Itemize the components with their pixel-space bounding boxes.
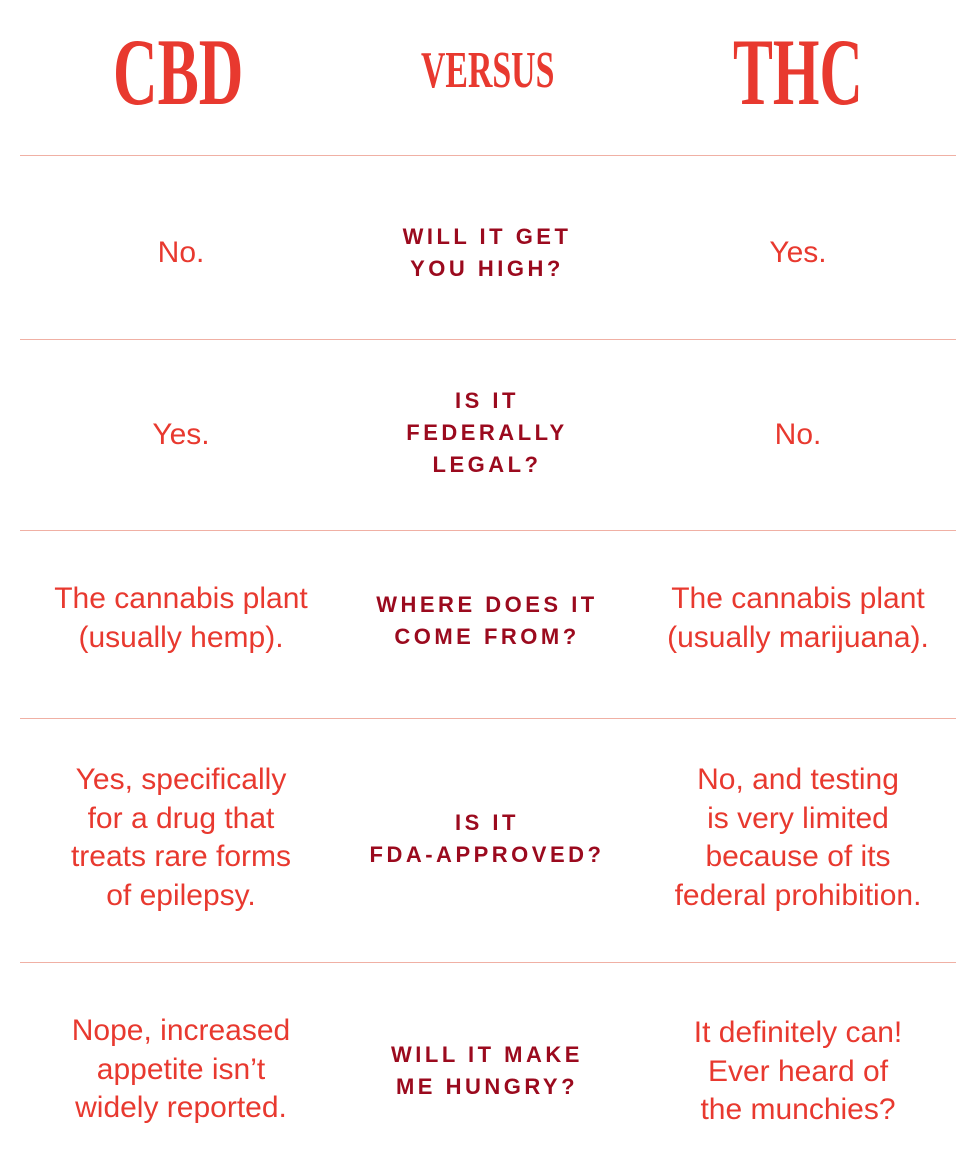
row 2: question: IS IT xyxy=(455,388,519,413)
row 4: THC answer: No, and testing xyxy=(697,763,899,796)
row 5: THC answer: the munchies? xyxy=(700,1093,896,1126)
row 5: THC answer xyxy=(694,1016,902,1126)
row 3: CBD answer xyxy=(54,582,308,654)
row 4: THC answer: federal prohibition. xyxy=(675,878,921,912)
row 4: CBD answer xyxy=(71,763,291,912)
row 3: CBD answer: (usually hemp). xyxy=(78,620,284,654)
row 5: CBD answer: Nope, increased xyxy=(72,1014,290,1047)
row 2: CBD answer: Yes. xyxy=(152,418,210,451)
row 4: CBD answer: treats rare forms xyxy=(71,840,291,873)
row 1: THC answer: Yes. xyxy=(769,236,827,269)
row 5: THC answer: Ever heard of xyxy=(708,1054,888,1088)
row 2: question: FEDERALLY xyxy=(406,420,568,445)
row 4: THC answer: because of its xyxy=(705,840,891,873)
row 3: THC answer: (usually marijuana). xyxy=(667,620,929,654)
row 5: CBD answer xyxy=(72,1014,290,1124)
row 3: question: COME FROM? xyxy=(394,624,580,649)
row 3: THC answer xyxy=(667,582,929,654)
row 2: THC answer: No. xyxy=(775,418,821,451)
row 4: THC answer: is very limited xyxy=(707,802,889,834)
row 2: question xyxy=(406,388,568,477)
row 1: question xyxy=(402,224,571,281)
row 1: question: YOU HIGH? xyxy=(410,256,564,281)
row 3: question xyxy=(376,592,598,649)
row 4: CBD answer: of epilepsy. xyxy=(106,878,256,912)
row 4: question xyxy=(370,810,604,867)
row 1: question: WILL IT GET xyxy=(403,224,571,249)
row 5: question: ME HUNGRY? xyxy=(396,1074,578,1099)
row 4: THC answer xyxy=(675,763,921,912)
row 1: CBD answer: No. xyxy=(158,236,204,269)
row 4: CBD answer: Yes, specifically xyxy=(76,763,286,796)
row 4: question: IS IT xyxy=(455,810,519,835)
row 5: question: WILL IT MAKE xyxy=(391,1042,583,1067)
row 2: question: LEGAL? xyxy=(432,452,542,477)
title: THC: THC xyxy=(733,19,863,125)
row 4: question: FDA-APPROVED? xyxy=(370,842,604,867)
row 3: CBD answer: The cannabis plant xyxy=(54,582,308,615)
title: CBD: CBD xyxy=(113,19,243,125)
row 3: question: WHERE DOES IT xyxy=(376,592,598,617)
title: VERSUS: VERSUS xyxy=(421,42,554,99)
row 5: question xyxy=(391,1042,583,1099)
row 5: CBD answer: appetite isn’t xyxy=(97,1052,265,1086)
row 4: CBD answer: for a drug that xyxy=(88,802,274,834)
row 5: THC answer: It definitely can! xyxy=(694,1016,902,1049)
row 3: THC answer: The cannabis plant xyxy=(671,582,925,615)
row 5: CBD answer: widely reported. xyxy=(75,1091,287,1124)
